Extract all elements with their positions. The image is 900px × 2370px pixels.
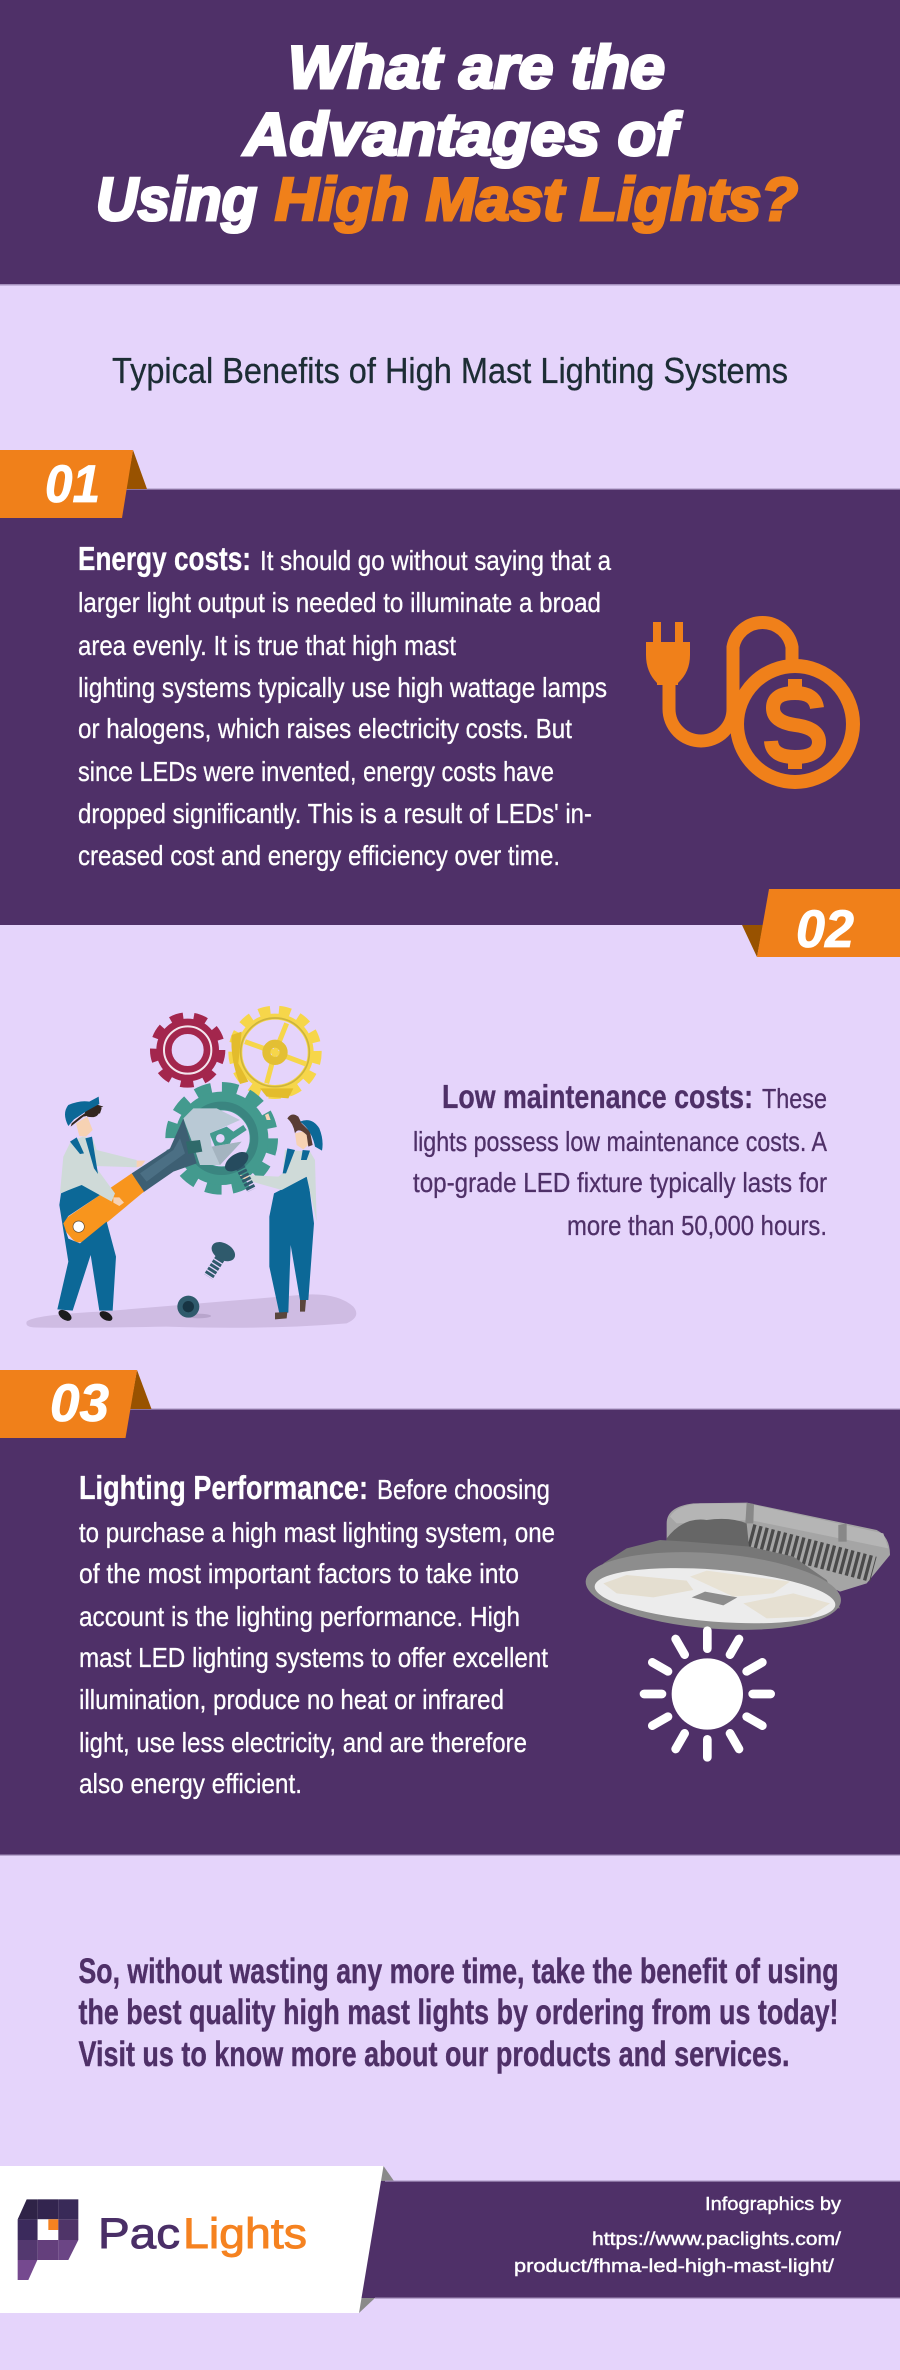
text block: low maintenance costs: more than 50,000 hours. xyxy=(567,1210,827,1241)
title line 3: High Mast Lights? xyxy=(275,166,798,233)
logo wordmark: Pac xyxy=(98,2210,180,2258)
call to action text xyxy=(78,1952,838,2074)
title line 2: Advantages of xyxy=(242,101,682,168)
credit text: Infographics by xyxy=(705,2194,841,2214)
badge 02 xyxy=(742,889,900,959)
gear: teal xyxy=(172,1088,272,1188)
tool: wrench xyxy=(63,1108,242,1242)
icon: high mast LED fixture xyxy=(583,1503,890,1639)
text block: low maintenance costs: Low maintenance costs: xyxy=(442,1078,753,1115)
text block: lighting performance: light, use less electricity, and are therefore xyxy=(79,1727,527,1758)
figure: left worker xyxy=(57,1097,145,1323)
badge 03 xyxy=(0,1370,152,1438)
logo wordmark xyxy=(98,2210,307,2258)
logo: PacLights xyxy=(18,2199,307,2280)
gear: red xyxy=(155,1017,221,1083)
text block: energy costs: creased cost and energy efficiency over time. xyxy=(78,840,560,871)
text block: energy costs: lighting systems typically use high wattage lamps xyxy=(78,672,607,703)
text block: energy costs: Energy costs: xyxy=(78,540,251,577)
badge 03: 03 xyxy=(50,1374,109,1433)
panel: 03 lighting performance xyxy=(0,1370,900,1856)
text block: lighting performance: also energy efficient. xyxy=(79,1768,302,1799)
gear: yellow xyxy=(231,1011,317,1098)
text block: lighting performance: Lighting Performance: xyxy=(79,1469,368,1506)
badge 02: 02 xyxy=(796,900,854,959)
subheading: Typical Benefits of High Mast Lighting Systems xyxy=(112,350,788,391)
text block: lighting performance xyxy=(79,1469,555,1799)
footer ribbon xyxy=(0,2166,900,2313)
panel: title header xyxy=(0,0,900,286)
icon: sun xyxy=(644,1631,771,1757)
figure: right worker xyxy=(240,1113,323,1319)
illustration: workers repairing gears xyxy=(26,1011,356,1328)
credit text xyxy=(514,2194,841,2276)
credit text: https://www.paclights.com/ xyxy=(592,2229,841,2249)
text block: lighting performance: Before choosing xyxy=(377,1474,550,1505)
text block: low maintenance costs: These xyxy=(762,1083,827,1114)
badge 01: 01 xyxy=(45,455,100,514)
text block: energy costs: It should go without saying that a xyxy=(260,545,611,576)
panel: 02 low maintenance costs xyxy=(0,889,900,1409)
text block: lighting performance: mast LED lighting systems to offer excellent xyxy=(79,1642,548,1673)
text block: lighting performance: to purchase a high mast lighting system, one xyxy=(79,1517,555,1548)
title line 1: What are the xyxy=(288,34,665,101)
text block: lighting performance: illumination, produce no heat or infrared xyxy=(79,1684,504,1715)
text block: energy costs xyxy=(78,540,611,871)
text block: energy costs: since LEDs were invented, energy costs have xyxy=(78,756,554,787)
logo wordmark: Lights xyxy=(183,2210,307,2258)
credit text: product/fhma-led-high-mast-light/ xyxy=(514,2256,834,2276)
icon: bolt held by worker xyxy=(222,1148,252,1190)
text block: energy costs: or halogens, which raises electricity costs. But xyxy=(78,713,572,744)
text block: energy costs: dropped significantly. This is a result of LEDs' in- xyxy=(78,798,592,829)
icon: plug and dollar coin xyxy=(646,622,853,782)
text block: energy costs: larger light output is needed to illuminate a broad xyxy=(78,587,601,618)
text block: lighting performance: of the most important factors to take into xyxy=(79,1558,519,1589)
text block: low maintenance costs: top-grade LED fixture typically lasts for xyxy=(413,1167,827,1198)
icon: falling screw xyxy=(208,1238,238,1277)
icon: screw head xyxy=(177,1296,211,1318)
text block: energy costs: area evenly. It is true that high mast xyxy=(78,630,456,661)
title line 3: Using xyxy=(96,166,257,233)
badge 01 xyxy=(0,450,147,518)
text block: lighting performance: account is the lighting performance. High xyxy=(79,1601,520,1632)
panel: 01 energy costs xyxy=(0,450,900,925)
text block: low maintenance costs: lights possess low maintenance costs. A xyxy=(413,1126,827,1157)
text block: low maintenance costs xyxy=(413,1078,827,1241)
logo mark xyxy=(18,2199,78,2280)
